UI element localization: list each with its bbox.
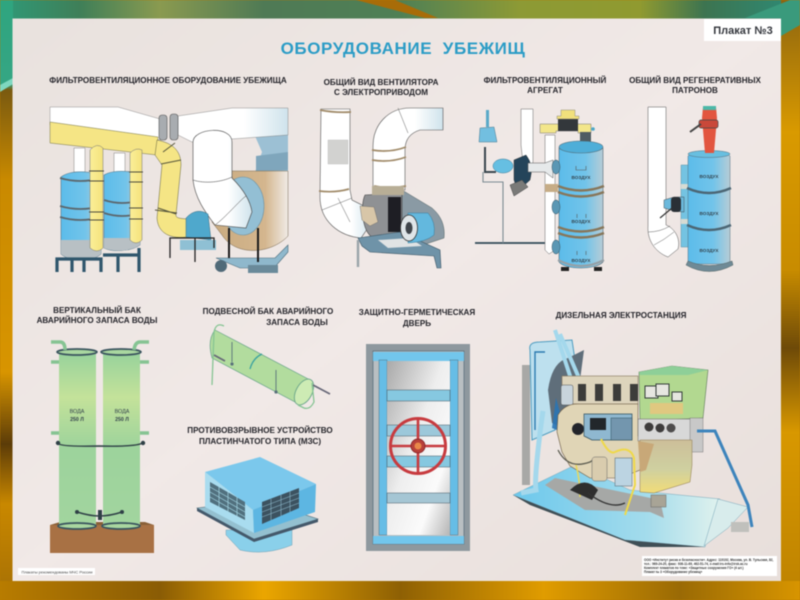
motor — [408, 213, 434, 243]
heading: fan: ОБЩИЙ ВИД ВЕНТИЛЯТОРА — [324, 78, 439, 87]
illustration: regenerative cartridges — [648, 106, 733, 272]
skid — [513, 465, 720, 547]
filter cylinders — [61, 172, 101, 260]
yellow main pipe — [50, 122, 158, 155]
top pipe — [521, 109, 533, 172]
green control box — [639, 366, 708, 421]
block — [557, 404, 645, 478]
white duct behind yellow pipe — [50, 107, 160, 140]
fan inlet — [222, 177, 264, 235]
fan — [514, 155, 531, 191]
publisher note: Комплект плакатов по теме: «Защитные сооружения ГО» (4 шт.) — [644, 566, 744, 570]
yellow flexible hose — [155, 140, 192, 237]
heading: door: ДВЕРЬ — [403, 319, 431, 328]
label: water right: 250 Л — [115, 417, 129, 423]
illustration: filter ventilation equipment — [50, 107, 288, 273]
heading: fan: С ЭЛЕКТРОПРИВОДОМ — [334, 88, 428, 97]
recommendation tag — [18, 568, 95, 575]
flanges — [159, 114, 178, 140]
small filter — [486, 110, 489, 127]
label: water left — [70, 409, 85, 423]
filter — [592, 457, 607, 481]
heading: regenerative cartridges — [629, 76, 762, 95]
cylinder — [559, 141, 603, 268]
illustration: fan with electric drive — [319, 108, 444, 268]
handwheel — [390, 418, 446, 474]
heading: blast device: ПЛАСТИНЧАТОГО ТИПА (МЗС) — [199, 437, 321, 446]
ports — [552, 160, 560, 174]
heading: unit: АГРЕГАТ — [527, 86, 563, 95]
illustration: hanging tank — [210, 325, 330, 408]
heading: diesel: ДИЗЕЛЬНАЯ ЭЛЕКТРОСТАНЦИЯ — [556, 311, 687, 320]
heading: regenerative cartridges: ОБЩИЙ ВИД РЕГЕНЕРАТИВНЫХ — [629, 76, 762, 85]
heading: filter ventilation equipment: ФИЛЬТРОВЕНТИЛЯЦИОННОЕ ОБОРУДОВАНИЕ УБЕЖИЩА — [49, 76, 287, 85]
exhaust hose — [697, 431, 752, 527]
big stand — [216, 245, 288, 268]
label: water right: ВОДА — [115, 409, 130, 415]
heading: blast device: ПРОТИВОВЗРЫВНОЕ УСТРОЙСТВО — [187, 426, 333, 435]
label: air 3: ВОЗДУХ — [572, 258, 591, 263]
heading: unit — [484, 76, 607, 95]
fuel pump — [584, 414, 632, 440]
publisher note: ООО «Институт риска и безопасности». Адрес: 119192, Москва, ул. В. Тульская, 82, — [644, 558, 773, 562]
engine head — [562, 376, 638, 404]
poster number tag — [704, 19, 781, 41]
poster number tag: Плакат №3 — [713, 25, 773, 37]
illustration: blast protection device — [197, 457, 318, 552]
elbow — [193, 130, 252, 228]
recommendation tag: Плакаты рекомендованы МЧС России — [21, 570, 93, 574]
illustration: filter ventilation unit — [475, 109, 604, 271]
yellow manifold — [540, 123, 591, 133]
illustration: vertical water tanks — [50, 342, 154, 553]
heading: door — [359, 308, 475, 328]
vertical white pipe — [545, 135, 555, 254]
label: air cartridge 2: ВОЗДУХ — [700, 211, 719, 216]
publisher note: тел.: 969-24-20, факс: 936-11-69, 462-51-74, e-mail:irs-info@irsk.ac.ru — [644, 562, 748, 566]
motor — [493, 159, 513, 173]
yellow fuel lines — [601, 439, 635, 515]
heading: hanging tank — [203, 307, 333, 327]
heading: blast device — [187, 426, 333, 446]
heading: vertical tank: АВАРИЙНОГО ЗАПАСА ВОДЫ — [37, 316, 157, 325]
gauge panel — [638, 419, 692, 441]
heading: vertical tank: ВЕРТИКАЛЬНЫЙ БАК — [53, 306, 141, 315]
grey drive guard — [402, 190, 444, 246]
upper duct — [178, 108, 288, 142]
title: ОБОРУДОВАНИЕ УБЕЖИЩ — [281, 39, 525, 58]
label: air 2: ВОЗДУХ — [572, 219, 591, 224]
label: air 1: ВОЗДУХ — [572, 175, 591, 180]
publisher note: Плакат № 3 «Оборудование убежищ» — [644, 570, 703, 574]
publisher note — [642, 556, 777, 576]
yellow verticals — [90, 145, 103, 251]
white stubs — [74, 148, 85, 172]
heading: hanging tank: ПОДВЕСНОЙ БАК АВАРИЙНОГО — [203, 307, 333, 316]
label: water right — [115, 409, 130, 423]
frame — [358, 232, 441, 268]
label: air cartridge 1: ВОЗДУХ — [700, 174, 719, 179]
heading: hanging tank: ЗАПАСА ВОДЫ — [266, 318, 328, 327]
fan housing — [362, 193, 402, 238]
label: air cartridge 3: ВОЗДУХ — [700, 248, 719, 253]
label: water left: ВОДА — [70, 409, 85, 415]
heading: door: ЗАЩИТНО-ГЕРМЕТИЧЕСКАЯ — [359, 308, 475, 317]
heading: vertical tank — [37, 306, 157, 325]
radiator — [522, 365, 530, 485]
label: water left: 250 Л — [70, 417, 84, 423]
dark parts — [570, 482, 598, 500]
illustration: diesel power station — [513, 330, 752, 547]
heading: regenerative cartridges: ПАТРОНОВ — [672, 86, 718, 95]
small motor — [186, 211, 211, 240]
illustration: hermetic door — [366, 344, 470, 551]
cylinder — [688, 152, 730, 264]
grey chassis — [545, 478, 664, 518]
heading: unit: ФИЛЬТРОВЕНТИЛЯЦИОННЫЙ — [484, 76, 607, 85]
red cone — [702, 107, 717, 153]
stands — [57, 259, 101, 272]
volute — [212, 171, 288, 250]
generator — [640, 440, 692, 493]
heading: fan — [324, 78, 439, 97]
